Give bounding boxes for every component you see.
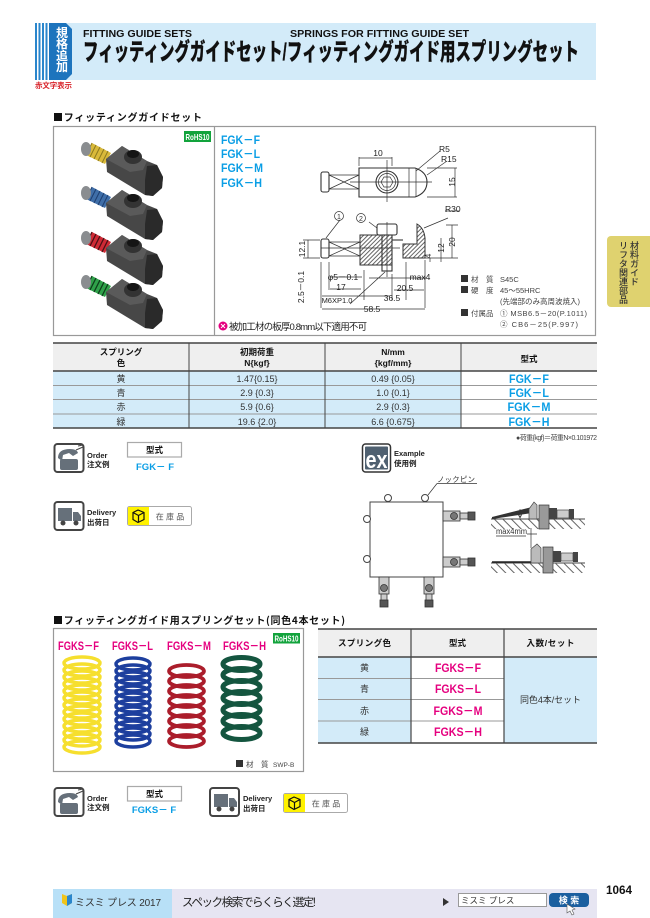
technical drawing: top view: [321, 144, 457, 202]
row: blue: 青: [116, 387, 126, 398]
specs: 45～55HRC: [500, 286, 541, 295]
row: yellow: 黄: [360, 662, 369, 673]
material note: [236, 759, 294, 769]
search box: ミスミ プレス: [461, 896, 514, 906]
row: green: FGK－H: [508, 415, 550, 429]
footer brand: ミスミ プレス 2017: [75, 897, 161, 909]
row: yellow: 0.49 {0.05}: [371, 374, 415, 384]
specs: S45C: [500, 275, 519, 284]
order model box: 型式: [146, 445, 163, 455]
model list: FGK－M: [221, 161, 263, 175]
row: blue: 青: [360, 683, 369, 694]
merged cell: 同色4本/セット: [520, 694, 581, 705]
dimension labels side: 4: [423, 253, 433, 258]
panel: springs: [54, 628, 304, 772]
row: green: [116, 415, 550, 429]
header row: 色: [117, 358, 126, 368]
badge: standard addition: 加: [56, 60, 68, 74]
search box: [458, 894, 546, 906]
row: green: 緑: [116, 416, 126, 427]
spring: blue: [116, 658, 150, 747]
footer logo icon: [62, 894, 72, 906]
dimension labels side: max4: [410, 272, 431, 282]
row: yellow: [116, 372, 549, 386]
header row: スプリング色: [338, 638, 391, 648]
dimension labels side: 1: [337, 214, 341, 221]
label: FGKS-M: FGKS－M: [167, 639, 211, 653]
header row: N{kgf}: [244, 358, 270, 368]
model list: [221, 133, 263, 190]
row: blue: 1.0 {0.1}: [376, 388, 410, 398]
order model box: [128, 786, 182, 816]
badge: standard addition: 規: [56, 26, 68, 40]
row: green: [360, 725, 482, 739]
dimension labels top: 10: [373, 148, 383, 158]
row: green: 緑: [360, 726, 369, 737]
dimension labels side: 17: [336, 282, 346, 292]
arrow: [443, 898, 449, 906]
header row: スプリング: [100, 347, 143, 357]
spring: yellow: [64, 657, 100, 753]
badge: standard addition: [35, 23, 72, 80]
icon: order: [54, 788, 84, 816]
technical drawing: side section: [296, 204, 461, 314]
specs: 材 質: [471, 274, 494, 284]
material note: SWP-B: [273, 762, 294, 769]
warning: 被加工材の板厚0.8mm以下適用不可: [229, 321, 367, 333]
label: order: [87, 451, 110, 469]
specs: 付属品: [471, 308, 494, 318]
order model box: [128, 442, 182, 473]
row: red: [116, 400, 551, 414]
header row: 初期荷重: [240, 347, 274, 357]
diagram: plate insertion: [491, 502, 585, 573]
row: blue: [116, 386, 549, 400]
specs: ② CB6－25(P.997): [500, 320, 578, 329]
header row: 入数/セット: [526, 638, 574, 648]
dimension labels side: 2: [359, 216, 363, 223]
model list: FGK－L: [221, 147, 260, 161]
load conversion note: ●荷重{kgf}＝荷重N×0.101972: [516, 433, 597, 442]
search button: [549, 893, 589, 915]
header band: [35, 23, 596, 80]
label: example: 使用例: [394, 458, 417, 468]
row: green: FGKS－H: [434, 725, 482, 739]
row: blue: [360, 682, 481, 696]
label: FGKS-L: FGKS－L: [112, 639, 153, 653]
badge: standard addition: 追: [56, 48, 68, 63]
label: FGKS-H: FGKS－H: [223, 639, 266, 653]
model list: FGK－H: [221, 176, 262, 190]
spec table: [53, 343, 597, 429]
spring: green: [223, 658, 260, 740]
icon: delivery: [210, 788, 239, 816]
order model box: FGKS－ F: [132, 805, 176, 816]
rohs badge: RoHS10: [186, 132, 210, 142]
knock pins: [364, 494, 428, 562]
dimension labels side: 20: [447, 237, 457, 247]
header row: 型式: [449, 638, 466, 648]
specs: (先端部のみ高周波焼入): [500, 296, 580, 306]
label: example: Example: [394, 449, 425, 458]
label: order: 注文例: [87, 802, 110, 812]
row: red: 2.9 {0.3}: [376, 402, 410, 412]
heading: spring set: ■フィッティングガイド用スプリングセット(同色4本セット): [53, 612, 345, 627]
red text note: 赤文字表示: [35, 80, 72, 90]
row: blue: 2.9 {0.3}: [240, 388, 274, 398]
row: green: 19.6 {2.0}: [238, 417, 276, 427]
stock badge: [284, 794, 348, 812]
label: order: Order: [87, 451, 108, 460]
dimension labels top: [373, 144, 457, 187]
row: yellow: 黄: [116, 373, 126, 384]
model list: FGK－F: [221, 133, 260, 147]
badge: standard addition: 格: [56, 36, 68, 51]
label: order: 注文例: [87, 459, 110, 469]
header row: [338, 638, 574, 648]
header row: 型式: [520, 354, 538, 364]
product photo: blue: [81, 186, 163, 240]
subtitle: fitting guide sets: FITTING GUIDE SETS: [83, 29, 192, 40]
label: max 4mm: max4mm: [496, 527, 527, 536]
footer bar: [53, 889, 597, 918]
dimension labels side: 12.1: [297, 240, 307, 257]
stock badge: 在 庫 品: [312, 798, 340, 808]
dimension labels side: φ5－0.1: [328, 272, 359, 282]
label: delivery: 出荷日: [243, 803, 266, 813]
side tab: リフタ関連部品: [618, 241, 628, 305]
spring: red: [169, 665, 204, 747]
heading: fitting guide set: ■フィッティングガイドセット: [53, 109, 202, 124]
rohs badge: RoHS10: [274, 634, 299, 644]
dimension labels top: 15: [447, 177, 457, 187]
side tab: 材料ガイド: [629, 240, 639, 286]
dimension labels side: 58.5: [364, 304, 381, 314]
dimension labels side: 12: [436, 243, 446, 253]
specs: [461, 274, 588, 329]
specs: 硬 度: [471, 285, 494, 295]
spring table: [318, 629, 597, 743]
dimension labels side: R30: [445, 204, 461, 214]
material note: 材 質: [246, 759, 269, 769]
dimension labels side: M6XP1.0: [322, 296, 352, 305]
label: delivery: [243, 794, 273, 813]
row: yellow: FGK－F: [509, 372, 549, 386]
label: delivery: Delivery: [87, 508, 117, 517]
icon: delivery: [54, 502, 84, 530]
footer slogan: スペック検索でらくらく選定!: [182, 895, 316, 909]
dimension labels top: R5: [439, 144, 450, 154]
product photo: red: [81, 231, 163, 285]
header row: [100, 347, 538, 368]
specs: ① MSB6.5－20(P.1011): [500, 309, 588, 318]
label: knock pin: ノックピン: [437, 475, 475, 484]
rohs badge: [184, 131, 211, 142]
diagram: plate with guides: [364, 475, 477, 607]
row: red: [360, 704, 482, 718]
row: red: 5.9 {0.6}: [240, 402, 274, 412]
icon: order: [54, 444, 84, 472]
dimension labels side: [296, 204, 461, 314]
label: delivery: 出荷日: [87, 517, 110, 527]
subtitle: springs for fitting guide set: SPRINGS FOR FITTING GUIDE SET: [290, 29, 469, 40]
header row: {kgf/mm}: [375, 358, 412, 368]
row: red: FGKS－M: [434, 704, 482, 718]
row: red: 赤: [360, 706, 369, 716]
panel: fitting guide set: [54, 126, 596, 336]
header row: N/mm: [381, 347, 405, 357]
dimension labels side: 36.5: [384, 293, 401, 303]
guides: right: [443, 511, 475, 567]
row: yellow: FGKS－F: [435, 661, 481, 675]
label: delivery: Delivery: [243, 794, 273, 803]
label: order: [87, 794, 110, 812]
label: delivery: [87, 508, 117, 527]
row: yellow: [360, 661, 481, 675]
search button: 検 索: [559, 894, 579, 906]
label: FGKS-F: FGKS－F: [58, 639, 99, 653]
dimension labels side: 20.5: [397, 283, 414, 293]
order model box: 型式: [146, 789, 163, 799]
label: order: Order: [87, 794, 108, 803]
row: yellow: 1.47{0.15}: [236, 374, 278, 384]
product photo: yellow: [81, 142, 163, 196]
label: example: [394, 449, 425, 468]
icon: example: ex: [366, 447, 388, 474]
guides: bottom: [379, 577, 434, 607]
order model box: FGK－ F: [136, 462, 174, 473]
dimension labels top: R15: [441, 154, 457, 164]
row: blue: FGK－L: [509, 386, 549, 400]
row: red: FGK－M: [508, 400, 551, 414]
side tab: [607, 236, 650, 307]
row: green: 6.6 {0.675}: [371, 417, 415, 427]
page number: 1064: [606, 884, 633, 897]
stock badge: [128, 506, 192, 526]
dimension labels side: 2.5－0.1: [296, 271, 306, 303]
row: red: 赤: [116, 402, 126, 412]
row: blue: FGKS－L: [435, 682, 481, 696]
stock badge: 在 庫 品: [156, 512, 184, 522]
product photo: green: [81, 275, 163, 329]
